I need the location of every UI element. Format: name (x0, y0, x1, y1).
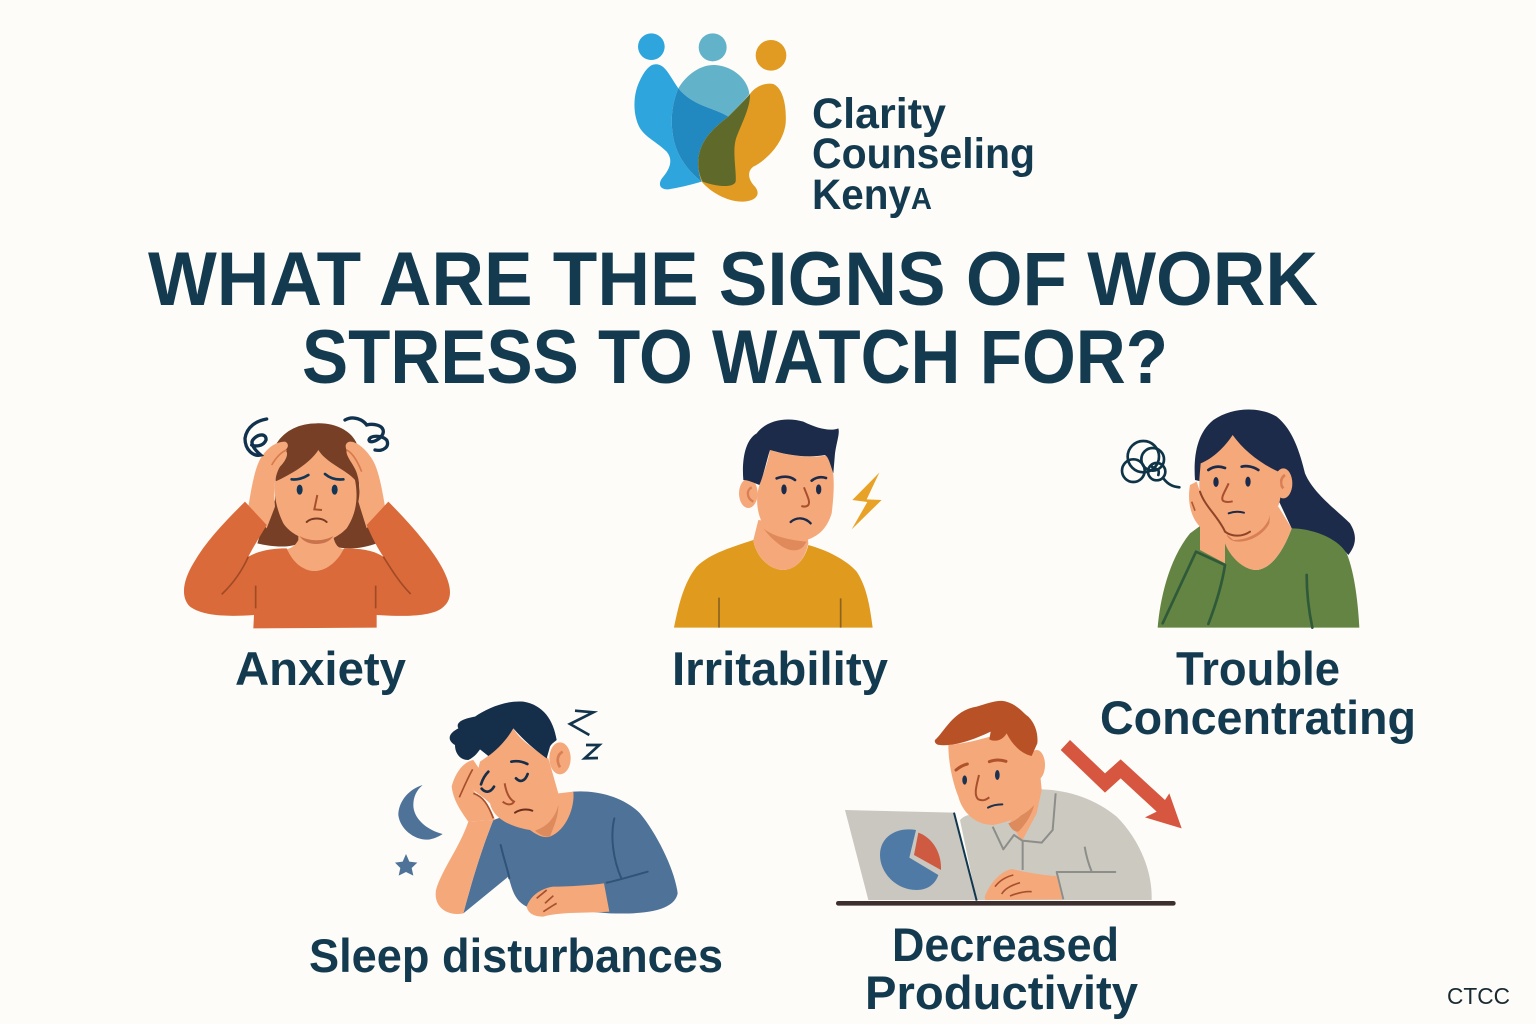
label: trouble concentrating: Trouble (1176, 642, 1340, 695)
credit: CTCC (1447, 983, 1510, 1009)
illustration: anxiety (184, 418, 450, 628)
label: anxiety: Anxiety (235, 642, 406, 695)
label: decreased productivity: Decreased (892, 918, 1119, 971)
label: decreased productivity (865, 918, 1138, 1019)
icon: scribble (1122, 441, 1179, 487)
logo wordmark (812, 90, 1035, 219)
label: trouble concentrating (1100, 642, 1416, 744)
logo wordmark: Counseling (812, 130, 1035, 178)
logo wordmark: KenyA (812, 171, 932, 219)
label: sleep disturbances: Sleep disturbances (309, 929, 723, 982)
title (148, 237, 1318, 400)
illustration: irritability (674, 419, 882, 628)
icon: star (395, 854, 417, 876)
label: trouble concentrating: Concentrating (1100, 691, 1416, 744)
icon: zzz (570, 711, 599, 758)
logo mark (634, 33, 786, 202)
illustration: decreased productivity (838, 701, 1182, 903)
icon: moon (398, 785, 443, 840)
label: decreased productivity: Productivity (865, 966, 1138, 1019)
illustration: sleep disturbances (395, 701, 678, 917)
chart: pie (880, 829, 941, 890)
icon: declining arrow (1061, 740, 1182, 828)
desk (838, 896, 1173, 910)
title: STRESS TO WATCH FOR? (302, 315, 1168, 400)
icon: lightning bolt (852, 473, 882, 529)
title: WHAT ARE THE SIGNS OF WORK (148, 237, 1318, 322)
illustration: trouble concentrating (1122, 410, 1359, 628)
label: irritability: Irritability (672, 642, 888, 695)
logo wordmark: Clarity (812, 90, 946, 138)
